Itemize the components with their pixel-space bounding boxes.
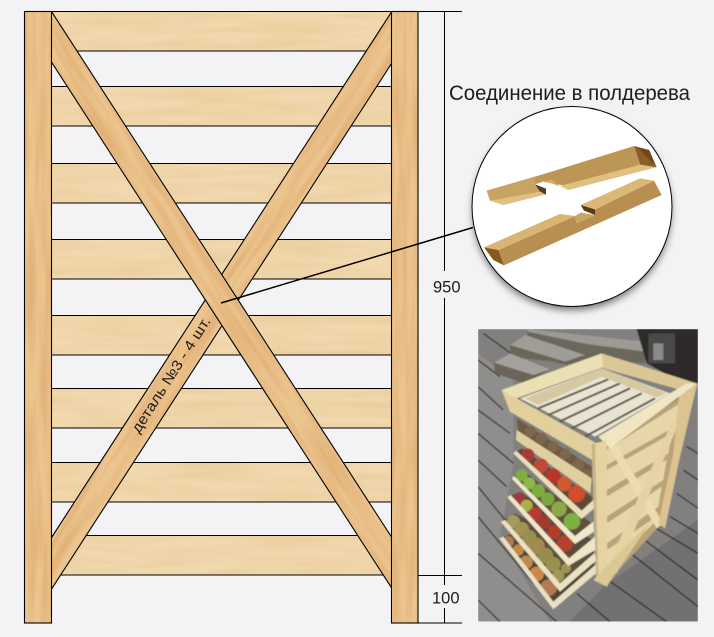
- potato tray in shadow: [517, 418, 592, 490]
- front-left panel: [502, 390, 597, 462]
- diagonal brace: top-left to bottom-right: [52, 12, 391, 588]
- diagonal brace: bottom-left to top-right: [52, 12, 391, 590]
- top tray: inner back rim: [525, 368, 667, 405]
- right back post: [658, 383, 697, 528]
- tray: potatoes: [499, 533, 596, 609]
- lower cross rail: [593, 523, 650, 587]
- heading: half-lap joint: Соединение в полдерева: [449, 82, 690, 105]
- detail circle: half-lap joint: [472, 106, 672, 310]
- horizontal slats: [52, 12, 392, 575]
- upper timber: [484, 146, 662, 265]
- tray: kiwi: [501, 513, 596, 592]
- tray: red and green apples: [507, 492, 595, 566]
- photo: finished rack with fruit trays: [478, 329, 698, 622]
- dimension lines: [392, 12, 462, 623]
- dimension: 950: 950: [433, 278, 461, 296]
- dark background, upper right: [637, 329, 698, 383]
- front post: [592, 441, 607, 587]
- right post: [392, 12, 418, 623]
- top tray: slatted bottom: [520, 368, 670, 437]
- leader line from crossing to detail circle: [221, 228, 473, 303]
- steps: [527, 329, 647, 363]
- deck plank lines: [478, 333, 698, 622]
- X braces on side: [616, 456, 661, 529]
- top tray: rim: [502, 353, 605, 400]
- circle: [472, 106, 672, 306]
- tray: green apples: [512, 469, 594, 544]
- dimension: 100: 100: [432, 590, 460, 608]
- lower timber: [498, 181, 662, 265]
- tray: tomatoes: [513, 448, 594, 519]
- drawing: rack side frame: [7, 0, 437, 623]
- circle shadow: [473, 112, 671, 310]
- deck background: [478, 329, 698, 622]
- side panel with slats: [606, 399, 679, 572]
- part label on diagonal brace: деталь №3 - 4 шт.: [129, 315, 214, 436]
- left post: [24, 12, 52, 623]
